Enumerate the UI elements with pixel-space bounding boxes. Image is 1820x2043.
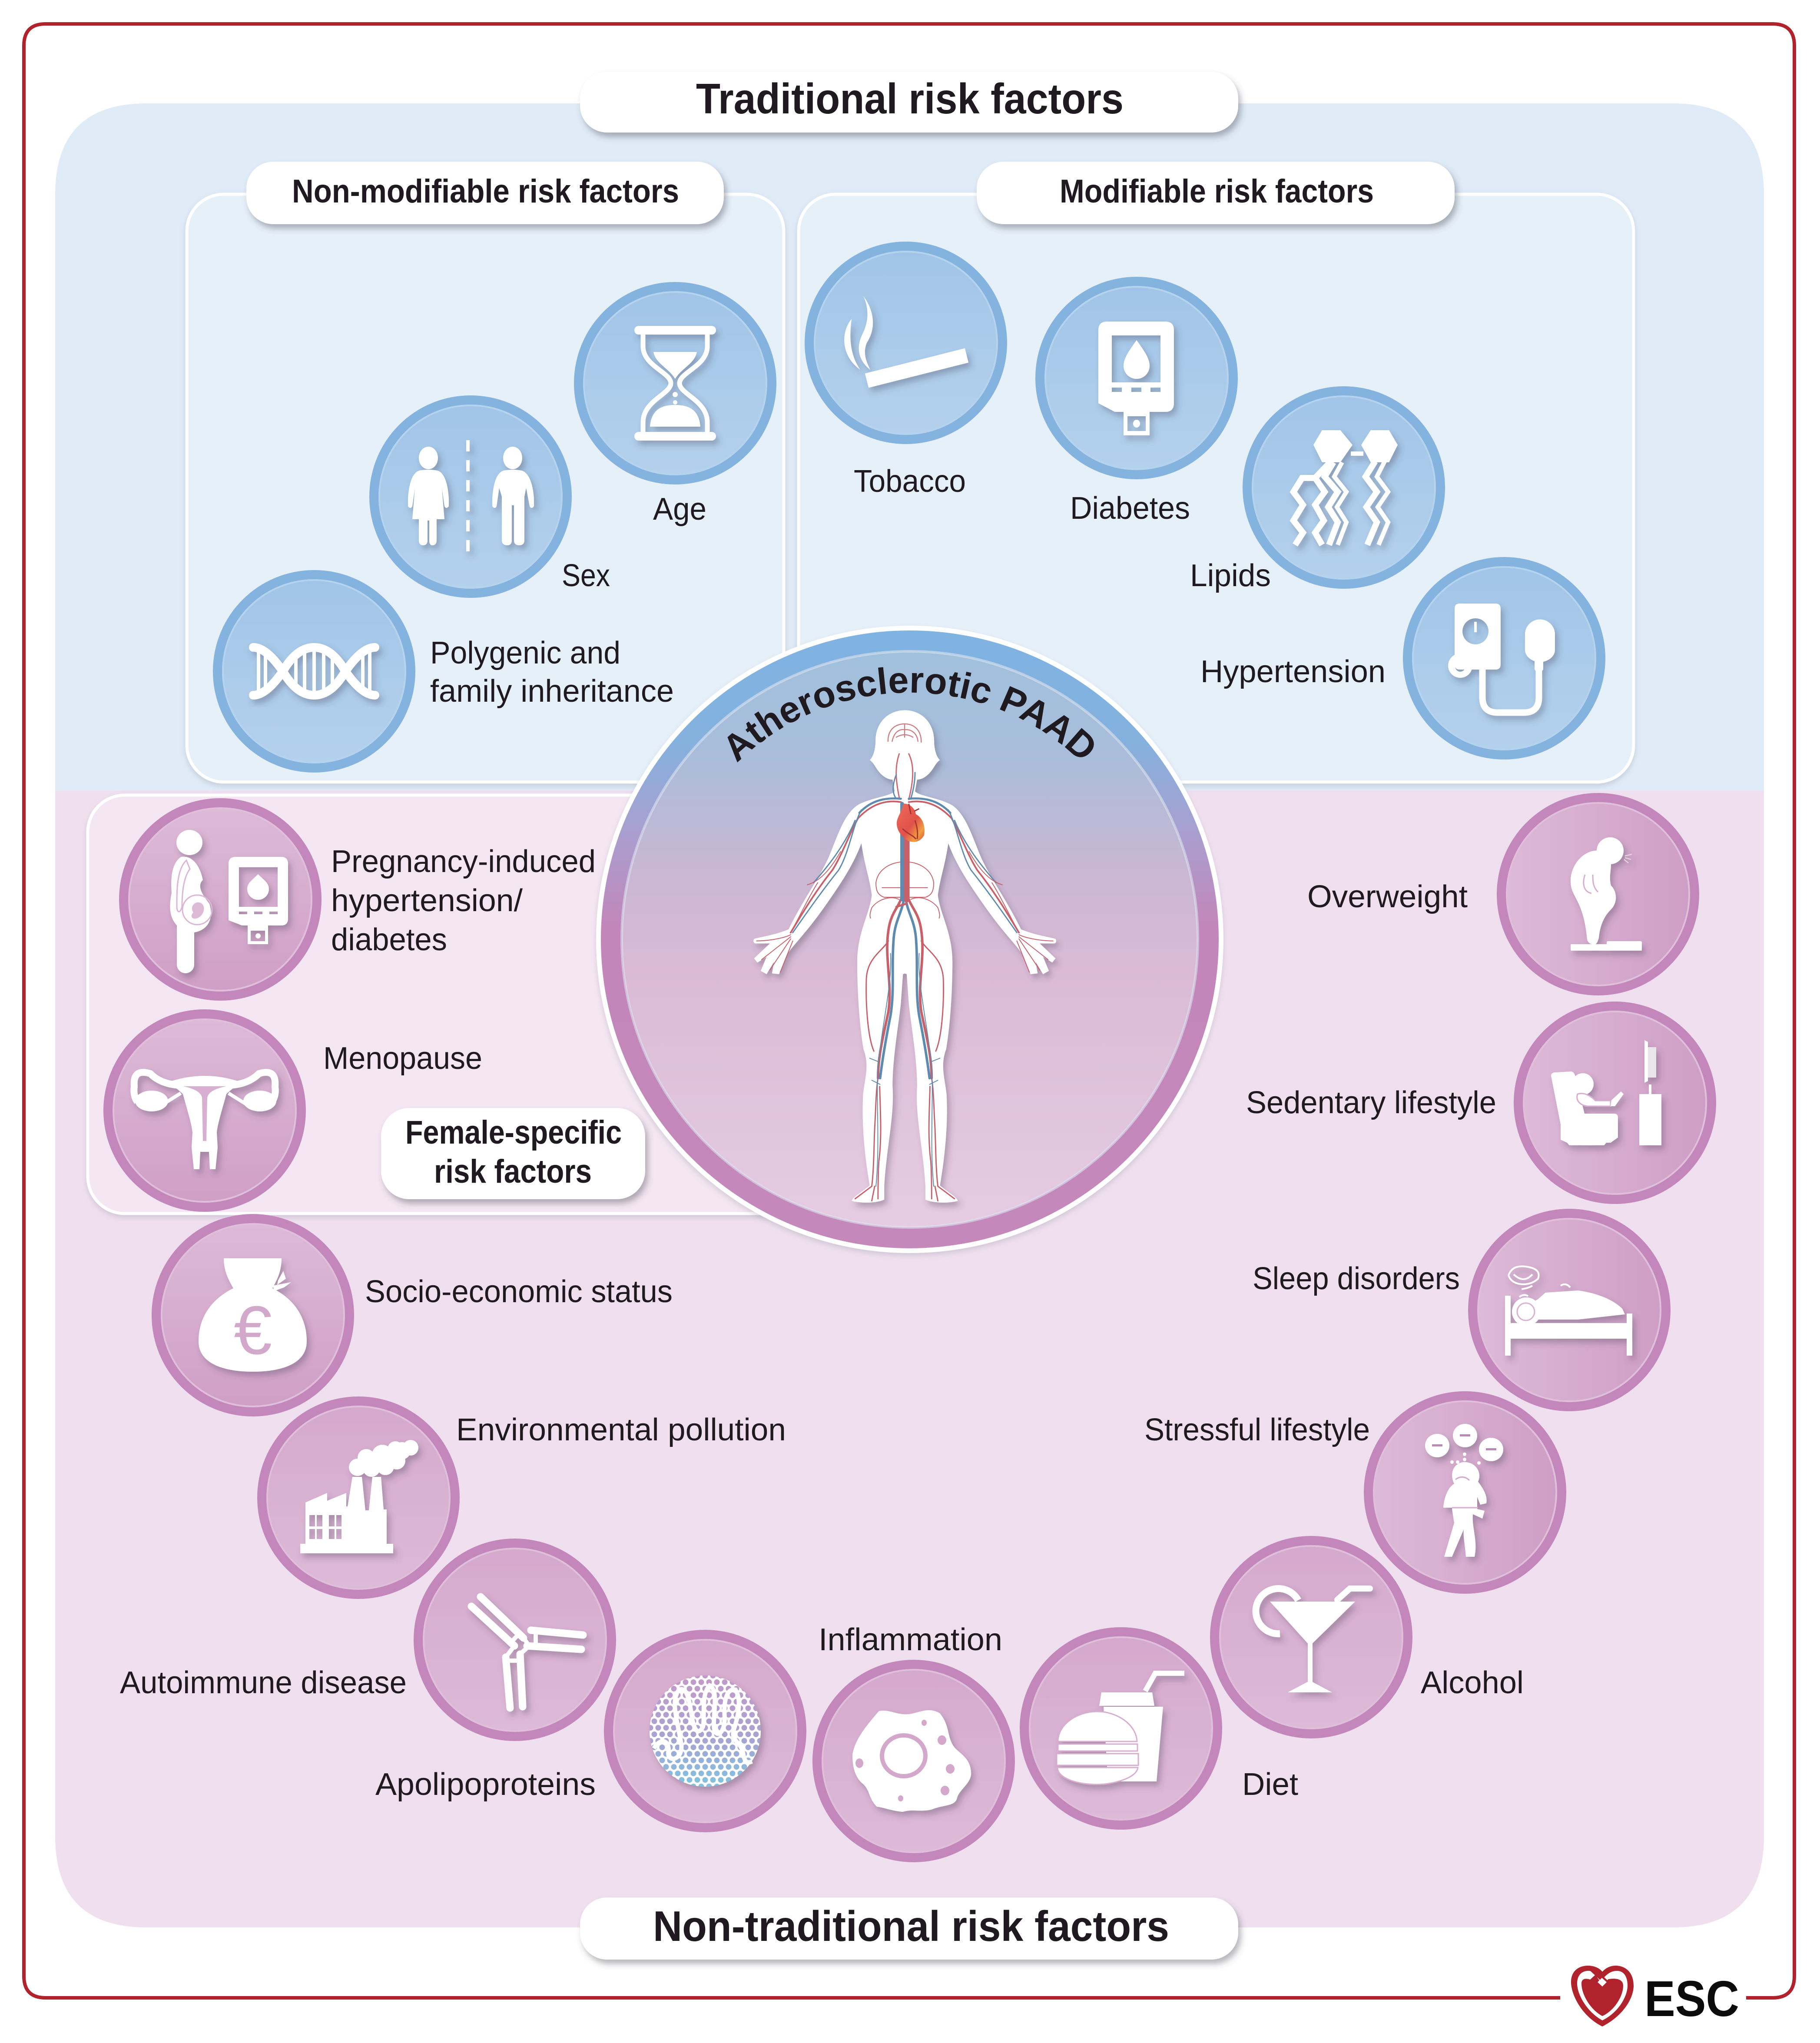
label: Pregnancy-induced hypertension/diabetes: Pregnancy-induced <box>331 844 596 879</box>
label: Sleep disorders: Sleep disorders <box>1253 1261 1460 1296</box>
heart <box>897 804 925 842</box>
label: Sex: Sex <box>562 558 610 593</box>
label: Socio-economic status: Socio-economic status <box>365 1274 673 1309</box>
circle icon: tobacco <box>805 242 1007 444</box>
circle icon: overweight figure on scale <box>1497 793 1699 995</box>
label: Polygenic and family inheritance: family inheritance <box>430 674 674 709</box>
circle icon: stressful lifestyle person <box>1364 1391 1566 1594</box>
circle icon: pregnancy <box>119 798 322 1001</box>
label: Pregnancy-induced hypertension/diabetes <box>331 844 596 957</box>
right side of body <box>906 799 1053 1201</box>
ESC logo <box>1571 1966 1739 2027</box>
panel: modifiable risk factors <box>799 194 1634 782</box>
label: Apolipoproteins: Apolipoproteins <box>375 1767 596 1802</box>
label: Pregnancy-induced hypertension/diabetes: diabetes <box>331 922 447 957</box>
aorta and vena cava <box>904 835 910 899</box>
heading pill: Female-specific risk factors: risk factors <box>434 1153 592 1190</box>
label: Overweight: Overweight <box>1307 879 1468 914</box>
heading pill: Non-modifiable risk factors: Non-modifiable risk factors <box>292 173 679 210</box>
heading pill: Non-modifiable risk factors <box>246 162 724 224</box>
heading pill: Non-traditional risk factors <box>580 1897 1238 1960</box>
heading pill: Modifiable risk factors <box>977 162 1455 224</box>
panel: traditional background <box>55 103 1764 791</box>
label: Tobacco: Tobacco <box>854 464 966 499</box>
heading pill: Female-specific risk factors <box>381 1108 645 1199</box>
label: Polygenic and family inheritance <box>430 636 674 709</box>
circle icon: lipids <box>1243 386 1445 589</box>
heading pill: Modifiable risk factors: Modifiable risk factors <box>1060 173 1374 210</box>
circle icon: sleep disorders bed <box>1468 1209 1671 1411</box>
circle icon: diet burger and drink <box>1020 1627 1222 1830</box>
head vessels <box>888 724 921 742</box>
label: Pregnancy-induced hypertension/diabetes: hypertension/ <box>331 883 523 918</box>
circle icon: DNA <box>213 570 415 773</box>
label: Sedentary lifestyle: Sedentary lifestyle <box>1246 1085 1496 1120</box>
circle icon: sex <box>369 395 572 598</box>
circle icon: environmental pollution factory <box>257 1396 460 1599</box>
label: Diabetes: Diabetes <box>1070 491 1190 526</box>
heading pill: Traditional risk factors <box>580 72 1238 133</box>
circle icon: diabetes meter <box>1035 277 1238 479</box>
label: Diet: Diet <box>1242 1767 1298 1802</box>
circle icon: age <box>574 282 776 484</box>
panel: female-specific risk factors <box>88 795 826 1214</box>
circle icon: alcohol cocktail <box>1210 1536 1412 1738</box>
label: Age: Age <box>653 492 706 527</box>
label: Menopause: Menopause <box>323 1041 482 1076</box>
ESC logo: ESC <box>1644 1970 1739 2027</box>
heading pill: Traditional risk factors: Traditional risk factors <box>696 75 1124 123</box>
label: Stressful lifestyle: Stressful lifestyle <box>1144 1413 1370 1447</box>
circle icon: apolipoproteins <box>604 1630 806 1832</box>
heading pill: Female-specific risk factors: Female-specific <box>405 1114 622 1151</box>
human body with vascular system <box>753 710 1056 1203</box>
label: Alcohol: Alcohol <box>1421 1665 1524 1700</box>
circle icon: menopause uterus <box>103 1009 306 1212</box>
label: Inflammation: Inflammation <box>819 1622 1002 1657</box>
circle icon: blood pressure cuff <box>1403 557 1605 759</box>
circle icon: autoimmune antibody <box>414 1539 616 1741</box>
label: Autoimmune disease: Autoimmune disease <box>120 1665 407 1700</box>
central circle: atherosclerotic PAAD <box>596 626 1223 1253</box>
heading pill: Non-traditional risk factors: Non-traditional risk factors <box>653 1902 1169 1950</box>
label: Hypertension: Hypertension <box>1200 654 1386 689</box>
circle icon: inflammation cell <box>812 1660 1015 1862</box>
circle icon: sedentary lifestyle armchair <box>1514 1002 1716 1204</box>
circle icon: socio-economic money bag: € <box>234 1292 272 1369</box>
panel: non-modifiable risk factors <box>187 194 784 782</box>
panel: non-traditional background <box>55 791 1764 1927</box>
label: Lipids: Lipids <box>1190 558 1271 593</box>
label: Polygenic and family inheritance: Polygenic and <box>430 636 620 670</box>
curved heading: Atherosclerotic PAAD: Atherosclerotic PAAD <box>715 660 1105 769</box>
label: Environmental pollution: Environmental pollution <box>456 1413 786 1447</box>
circle icon: socio-economic money bag <box>152 1214 354 1416</box>
